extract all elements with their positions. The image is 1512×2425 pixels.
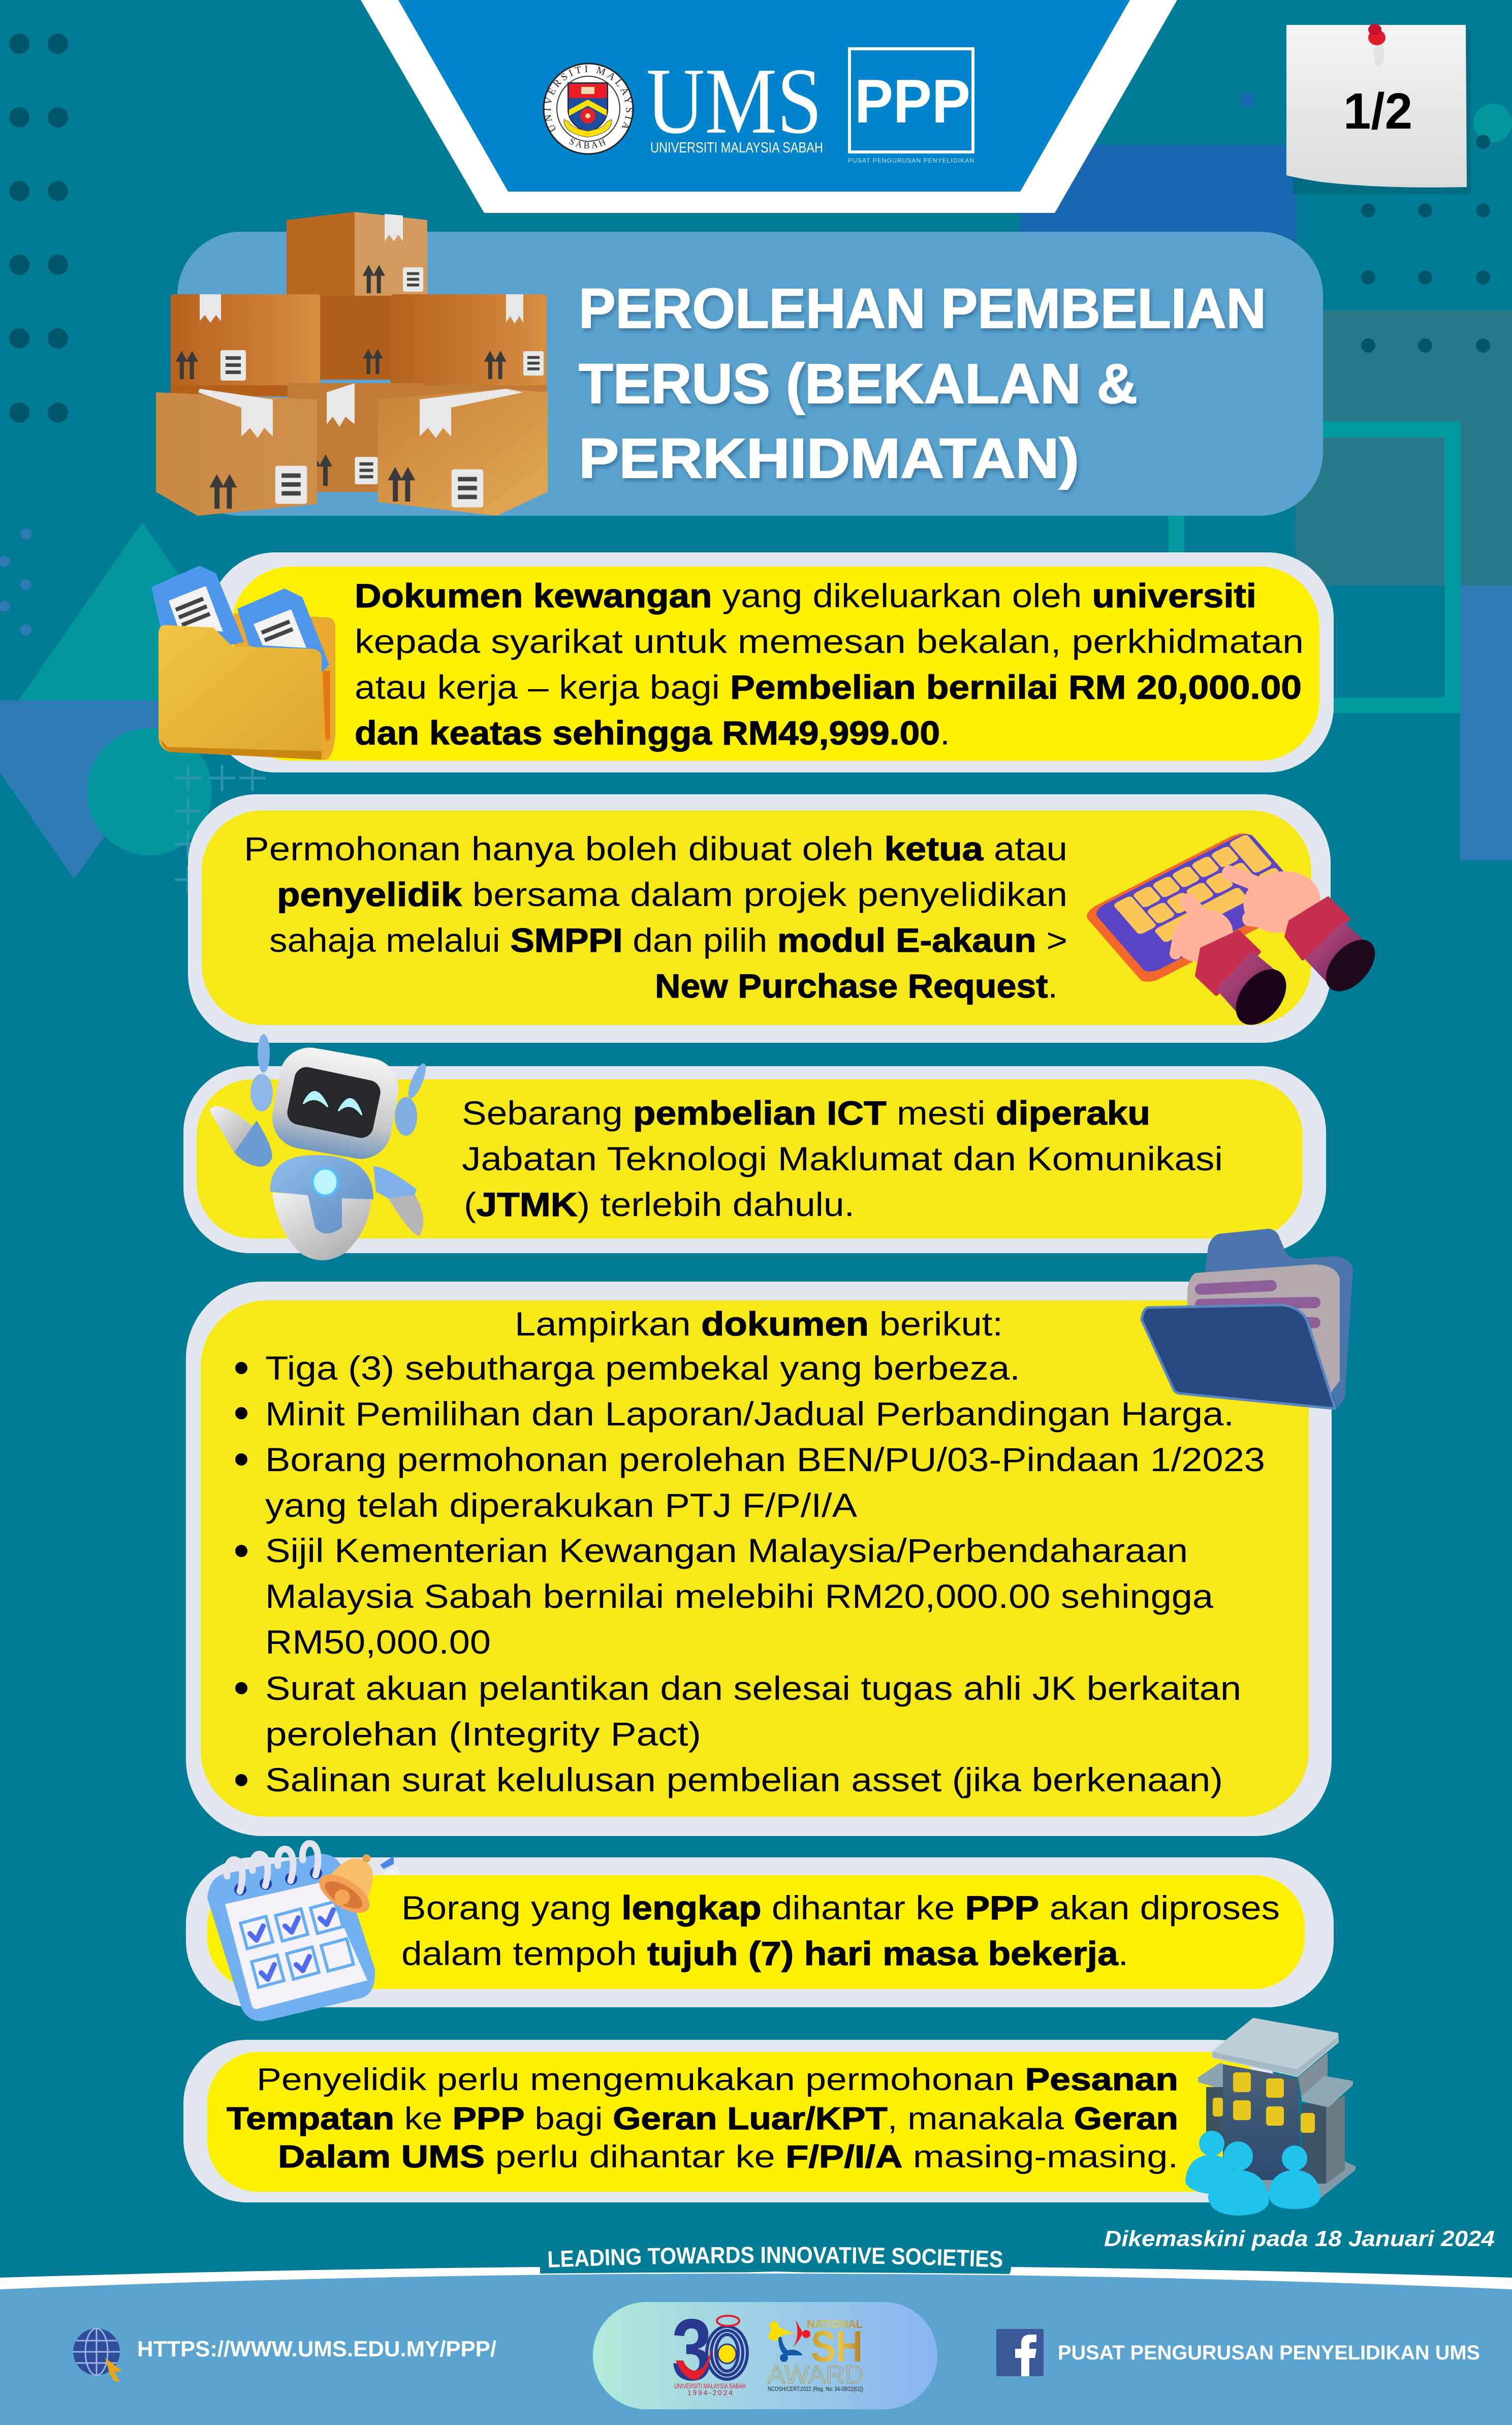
sticky note page number <box>1286 24 1471 194</box>
text block: Tempatan ke PPP bagi Geran Luar/KPT , manakala Geran <box>227 2101 1178 2136</box>
logo: UMS wordmark: UNIVERSITI MALAYSIA SABAH <box>650 140 823 156</box>
text block: (JTMK ) terlebih dahulu. <box>464 1186 855 1223</box>
text block: atau kerja – kerja bagi Pembelian bernilai RM 20,000.00 <box>355 668 1302 706</box>
title panel <box>177 232 1323 516</box>
text block <box>401 1889 1280 1972</box>
list text: Tiga (3) sebutharga pembekal yang berbeza. <box>265 1349 1020 1387</box>
logo: UMS 30 years: 1994-2024 <box>687 2388 733 2397</box>
logo: national OSH award: NATIONAL <box>807 2318 863 2330</box>
title text: PEROLEHAN PEMBELIAN <box>579 277 1266 340</box>
list text: Malaysia Sabah bernilai melebihi RM20,000.00 sehingga <box>265 1577 1213 1615</box>
list text: Salinan surat kelulusan pembelian asset (jika berkenaan) <box>265 1761 1223 1798</box>
logo: national OSH award: AWARD <box>768 2360 864 2389</box>
text block: Penyelidik perlu mengemukakan permohonan Pesanan <box>257 2062 1178 2097</box>
list text: RM50,000.00 <box>265 1623 491 1661</box>
text block: penyelidik bersama dalam projek penyelidikan <box>277 876 1067 913</box>
text block: Dalam UMS perlu dihantar ke F/P/I/A masing-masing. <box>278 2139 1178 2174</box>
list text: Surat akuan pelantikan dan selesai tugas ahli JK berkaitan <box>265 1669 1241 1707</box>
header banner with logos <box>361 0 1177 213</box>
icon: building with people <box>1185 2019 1356 2216</box>
sticky note page number: 1/2 <box>1343 83 1412 140</box>
title text: TERUS (BEKALAN & <box>579 353 1138 415</box>
logo: UMS seal: SABAH <box>569 138 606 148</box>
logo: national OSH award: NCOSH/CERT:2022 (Reg. No: 34-09/22[01]) <box>768 2385 863 2392</box>
icon: facebook <box>996 2329 1044 2376</box>
list text <box>265 1305 1265 1798</box>
icon: calendar with bell <box>207 1840 399 2021</box>
text block: Dokumen kewangan yang dikeluarkan oleh universiti <box>355 577 1256 614</box>
text block <box>227 2062 1178 2174</box>
panel: lampirkan dokumen <box>186 1282 1332 1836</box>
logo: national OSH award <box>768 2318 864 2392</box>
facebook link <box>996 2329 1480 2376</box>
tagline: LEADING TOWARDS INNOVATIVE SOCIETIES <box>549 2247 1002 2267</box>
text block <box>462 1094 1223 1223</box>
panel: pesanan tempatan <box>183 2040 1281 2202</box>
logo: PPP: PUSAT PENGURUSAN PENYELIDIKAN <box>848 157 974 164</box>
text block: sahaja melalui SMPPI dan pilih modul E-akaun > <box>269 921 1067 959</box>
text block: Sebarang pembelian ICT mesti diperaku <box>462 1094 1150 1132</box>
list text: Borang permohonan perolehan BEN/PU/03-Pindaan 1/2023 <box>265 1441 1265 1478</box>
icon: cardboard boxes <box>156 212 548 516</box>
icon: blue folder with paper <box>1142 1229 1353 1409</box>
footer wave band <box>0 2259 1512 2425</box>
panel: permohonan <box>188 794 1331 1043</box>
icon: robot <box>209 1034 429 1260</box>
text block: dalam tempoh tujuh (7) hari masa bekerja . <box>401 1935 1128 1972</box>
list text: Lampirkan dokumen berikut: <box>515 1305 1003 1343</box>
icon: globe with cursor <box>73 2328 122 2382</box>
text block: dan keatas sehingga RM49,999.00 . <box>355 714 950 752</box>
list text: yang telah diperakukan PTJ F/P/I/A <box>265 1486 857 1524</box>
text block <box>355 577 1304 752</box>
title text <box>579 277 1266 490</box>
icon: keyboard and hands <box>1082 828 1384 1034</box>
logo: UMS wordmark: UMS <box>646 49 822 153</box>
logo: PPP <box>848 49 974 164</box>
logo: national OSH award: SH <box>811 2322 863 2371</box>
logo: UMS 30 years: UNIVERSITI MALAYSIA SABAH <box>674 2382 746 2390</box>
panel: pembelian ICT <box>183 1066 1326 1253</box>
logo: UMS 30 years <box>672 2301 747 2399</box>
logo: PPP: PPP <box>855 67 970 136</box>
website link <box>73 2328 496 2382</box>
website link: HTTPS://WWW.UMS.EDU.MY/PPP/ <box>137 2337 496 2361</box>
text block <box>244 830 1067 1005</box>
panel: borang lengkap <box>186 1857 1334 2007</box>
text block: New Purchase Request . <box>655 967 1058 1005</box>
facebook link: PUSAT PENGURUSAN PENYELIDIKAN UMS <box>1058 2342 1480 2364</box>
text block: Jabatan Teknologi Maklumat dan Komunikasi <box>462 1140 1223 1177</box>
list text: Sijil Kementerian Kewangan Malaysia/Perbendaharaan <box>265 1532 1188 1569</box>
list text: perolehan (Integrity Pact) <box>265 1715 701 1753</box>
text block: Borang yang lengkap dihantar ke PPP akan diproses <box>401 1889 1280 1926</box>
panel: dokumen kewangan <box>209 552 1334 772</box>
updated date: Dikemaskini pada 18 Januari 2024 <box>1104 2226 1495 2251</box>
text block: kepada syarikat untuk memesan bekalan, perkhidmatan <box>355 623 1304 660</box>
logo: UMS 30 years: 3 <box>672 2301 712 2399</box>
bullets <box>235 1362 247 1786</box>
left hand <box>1166 901 1297 1034</box>
right hand <box>1230 865 1384 1001</box>
logo pill <box>593 2301 937 2409</box>
text block: Permohonan hanya boleh dibuat oleh ketua atau <box>244 830 1067 867</box>
people <box>1185 2131 1320 2216</box>
title text: PERKHIDMATAN) <box>579 427 1079 490</box>
bell <box>313 1840 393 1920</box>
logo: UMS seal: UNIVERSITI MALAYSIA <box>545 65 632 132</box>
list text: Minit Pemilihan dan Laporan/Jadual Perbandingan Harga. <box>265 1395 1234 1433</box>
icon: yellow folder with documents <box>151 566 335 760</box>
